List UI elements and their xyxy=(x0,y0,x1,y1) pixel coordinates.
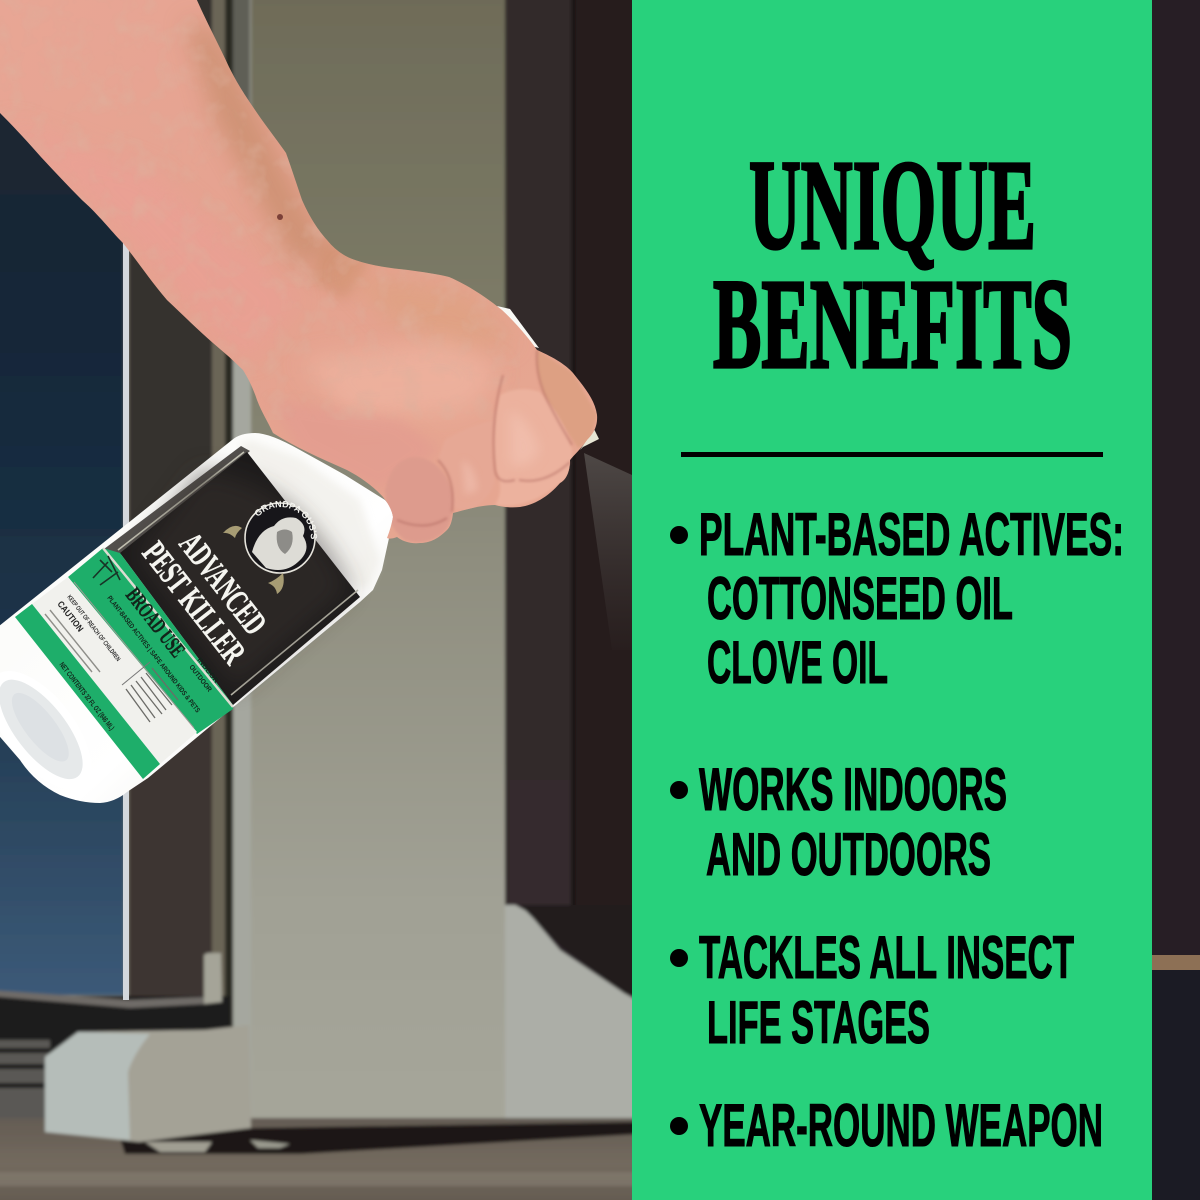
label: white caution panel xyxy=(32,577,197,764)
photo background: kitchen scene xyxy=(0,0,650,1200)
label: logo badge: GRANDPA GUS'S xyxy=(255,500,318,539)
label: insect icons xyxy=(93,556,120,585)
stainless fridge door xyxy=(0,90,124,995)
label: indoor outdoor: INDOOR xyxy=(195,657,219,685)
bottle shoulder shading xyxy=(238,440,380,590)
floor xyxy=(0,1118,650,1200)
benefit: indoors and outdoors: AND OUTDOORS xyxy=(706,821,991,888)
label: black panel xyxy=(120,452,360,705)
benefit: life stages: LIFE STAGES xyxy=(707,989,930,1056)
label: indoor outdoor xyxy=(187,657,219,693)
wall panel xyxy=(233,0,513,1130)
label: grey top band xyxy=(104,446,250,555)
label: green band xyxy=(68,548,233,734)
appliance shadow xyxy=(120,1122,640,1154)
benefit: indoors and outdoors xyxy=(670,756,1007,888)
benefit: life stages xyxy=(670,924,1074,1056)
skin mottling xyxy=(3,30,415,327)
finger creases xyxy=(397,350,572,526)
skin tones xyxy=(185,20,335,265)
benefit: plant-based actives: CLOVE OIL xyxy=(707,629,888,696)
nozzle tip xyxy=(580,429,599,450)
benefit: plant-based actives xyxy=(670,501,1124,696)
title xyxy=(713,134,1072,395)
label: claims line: PLANT-BASED ACTIVES | SAFE AROUND KIDS & PETS xyxy=(105,595,201,714)
bottle end xyxy=(0,654,110,806)
label: white caution panel: CAUTION xyxy=(55,599,85,634)
spray mist xyxy=(584,453,632,650)
label: broad use: BROAD USE xyxy=(121,583,191,662)
middle finger xyxy=(494,389,572,506)
index finger xyxy=(464,508,474,510)
thumb xyxy=(385,457,453,542)
label: advanced pest killer xyxy=(135,526,274,672)
steel trim highlight xyxy=(123,243,129,1000)
divider xyxy=(681,452,1103,457)
top finger xyxy=(537,350,597,448)
label: net contents: NET CONTENTS 32 FL OZ (946 ML) xyxy=(58,660,117,732)
dark cabinet xyxy=(515,902,632,999)
label: logo badge xyxy=(223,500,318,594)
green panel xyxy=(632,0,1152,1200)
label: indoor outdoor: OUTDOOR xyxy=(187,664,213,693)
label: advanced pest killer: PEST KILLER xyxy=(135,535,253,672)
under-fridge vent xyxy=(0,996,230,1056)
label: green footer strip xyxy=(15,604,160,779)
base cover xyxy=(83,1024,253,1145)
trigger tab xyxy=(497,306,539,348)
bottle body xyxy=(0,433,393,803)
spray bottle xyxy=(0,433,393,803)
right dark strip xyxy=(1152,0,1200,1200)
mole xyxy=(277,214,283,220)
fridge side panel xyxy=(129,0,214,522)
label: white caution panel: KEEP OUT OF REACH OF CHILDREN xyxy=(65,594,122,663)
arm and hand xyxy=(0,0,597,543)
label: advanced pest killer: ADVANCED xyxy=(172,526,274,642)
